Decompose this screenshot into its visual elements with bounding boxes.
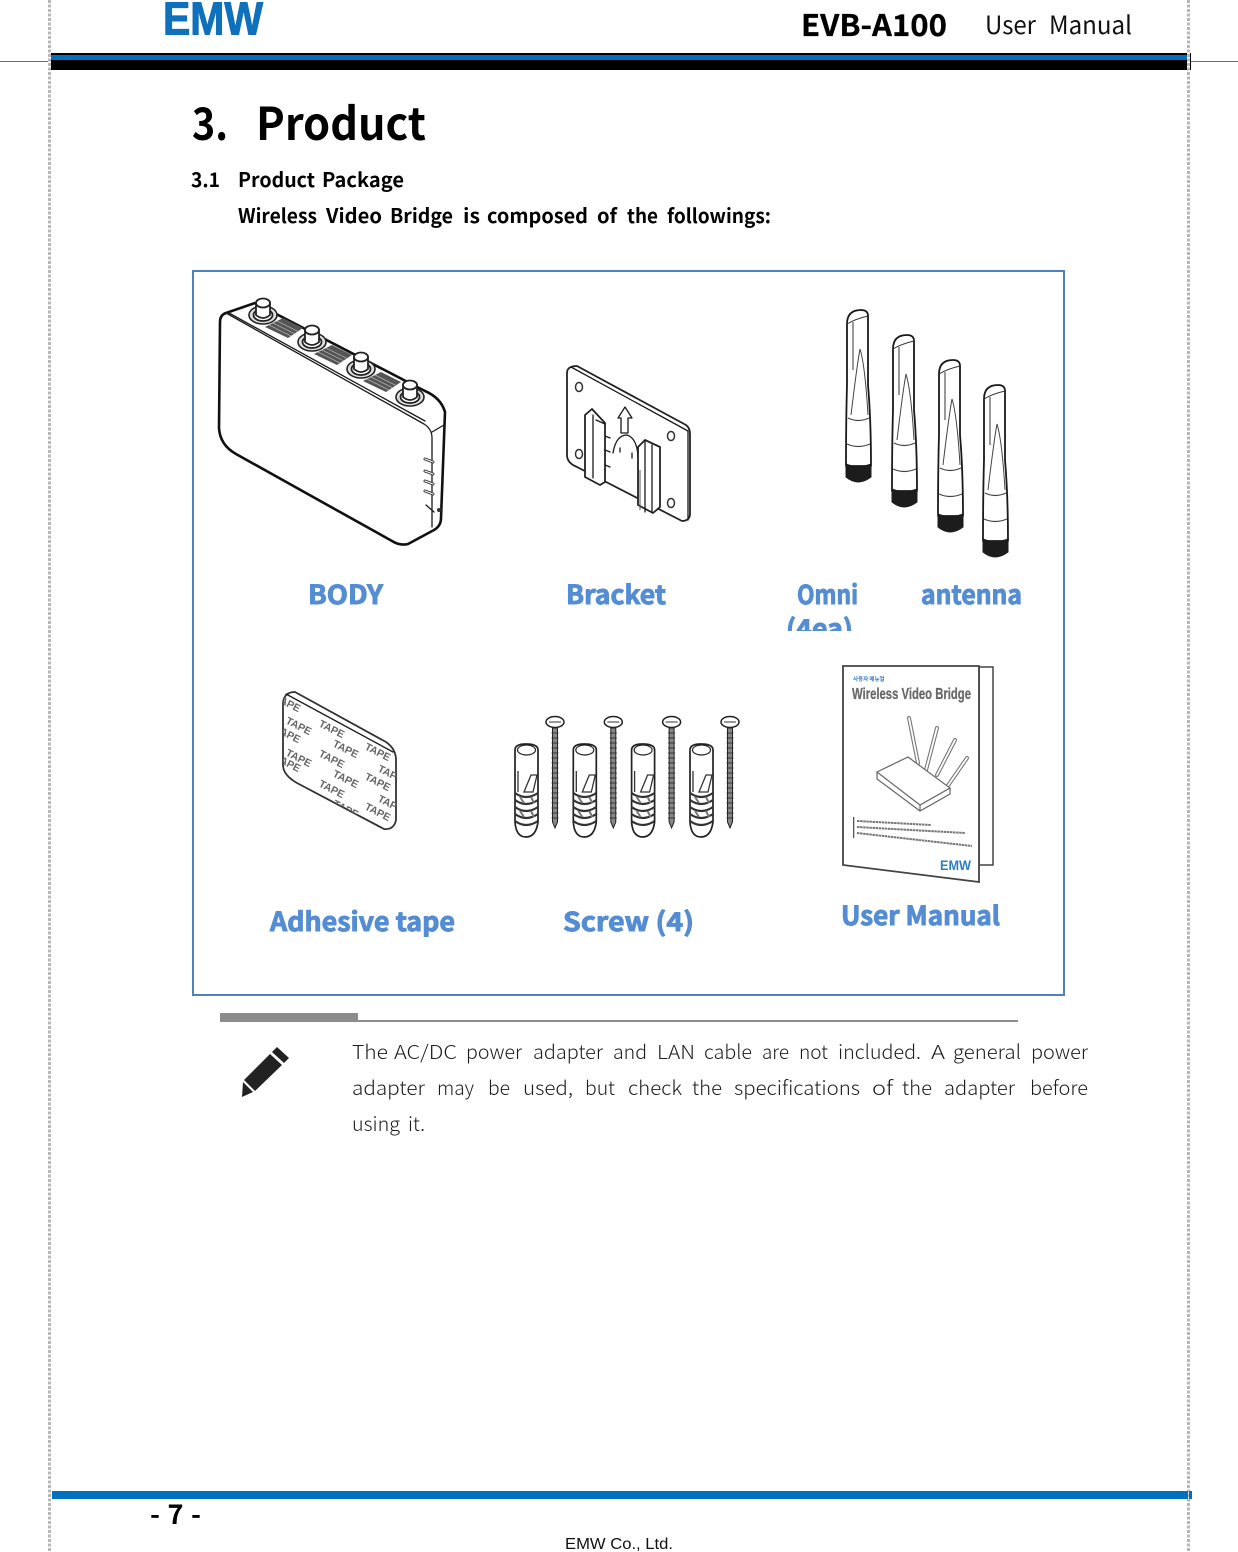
note text: it. [408,1108,425,1137]
note text: before [1030,1072,1088,1101]
illustration: omni antennas [846,310,1008,557]
illustration: screws and anchors [515,716,739,837]
illustration: adhesive tape [282,691,397,830]
note text: The [352,1036,388,1065]
note text: using [352,1108,400,1137]
illustration: bracket [567,366,690,521]
note text: the [692,1072,722,1101]
header rule [51,53,1191,70]
note text: be [488,1072,510,1101]
header title: EVB-A100: EVB-A100 [801,1,947,45]
intro sentence: of [597,200,619,229]
label: Omni antenna (4ea): Omni [797,575,858,612]
intro sentence: is [463,200,480,229]
header subtitle: User Manual: User [985,6,1036,42]
illustration: user manual booklet: EMW [940,857,972,873]
intro sentence [238,200,771,229]
heading: 3. Product: 3. [192,88,228,153]
illustration: adhesive tape: TAPE [317,748,346,771]
illustration: adhesive tape: TAPE [273,723,302,746]
note text: included. [838,1036,921,1065]
note text: may [437,1072,474,1101]
note text [352,1036,1089,1137]
label: User Manual: User Manual [841,896,1000,933]
illustration: adhesive tape: TAPE [331,798,360,821]
note text: adapter [352,1072,426,1101]
intro sentence: Bridge [390,200,453,229]
note text: are [762,1036,789,1065]
page number: - 7 - [150,1493,201,1532]
label: Screw (4): Screw (4) [563,902,694,939]
illustration: adhesive tape: TAPE [331,738,360,761]
header subtitle: User Manual: Manual [1049,6,1132,42]
illustration: adhesive tape: TAPE [331,768,360,791]
illustration: adhesive tape: TAPE [273,752,302,775]
intro sentence: the [627,200,658,229]
note text: adapter [944,1072,1016,1101]
note text: power [1031,1036,1089,1065]
label: Bracket: Bracket [566,575,666,612]
note text: used, [523,1072,573,1101]
note text: specifications [734,1072,860,1101]
label: Omni antenna (4ea): (4ea) [786,609,853,646]
note text: power [466,1036,523,1065]
intro sentence: composed [487,200,588,229]
note divider [220,1013,1018,1022]
note text: of [872,1072,894,1101]
subheading: 3.1 Product Package [191,164,404,193]
illustration: user manual booklet: Wireless Video Bridge [852,686,971,703]
illustration: adhesive tape: TAPE [317,718,346,741]
subheading: 3.1 Product Package: Product [238,164,316,193]
note text: AC/DC [394,1036,457,1065]
intro sentence: Video [325,200,382,229]
header subtitle: User Manual [985,6,1132,42]
label: Adhesive tape: Adhesive tape [269,902,455,939]
icon: pencil [242,1047,289,1097]
illustration: adhesive tape: TAPE [284,778,313,801]
note text: A [931,1036,946,1065]
illustration: adhesive tape: TAPE [363,801,392,824]
illustration: adhesive tape: TAPE [363,741,392,764]
illustration: user manual booklet [843,666,993,882]
note text: not [799,1036,828,1065]
label: Omni antenna (4ea) [788,582,1021,631]
label: BODY: BODY [308,575,384,612]
illustration: adhesive tape: TAPE [363,771,392,794]
illustration: body [219,298,445,545]
footer rule [52,1491,1192,1499]
note text: check [628,1072,682,1101]
illustration: adhesive tape: TAPE [273,692,302,715]
subheading: 3.1 Product Package: 3.1 [191,164,220,193]
illustration: adhesive tape: TAPE [284,747,313,770]
note text: general [953,1036,1021,1065]
label: Omni antenna (4ea): antenna [921,575,1022,612]
note text: adapter [533,1036,604,1065]
illustration: adhesive tape: TAPE [376,763,405,786]
illustration: adhesive tape: TAPE [317,778,346,801]
illustration: adhesive tape: TAPE [376,793,405,816]
illustration: adhesive tape: TAPE [284,715,313,738]
note text: cable [704,1036,752,1065]
note text: and [613,1036,647,1065]
intro sentence: Wireless [238,200,317,229]
intro sentence: followings: [667,200,771,229]
illustration: user manual booklet: 사용자 매뉴얼 [853,675,885,683]
note text: the [902,1072,932,1101]
heading: 3. Product: Product [256,88,426,153]
panel: package contents [193,271,1064,995]
note text: but [585,1072,615,1101]
note text: LAN [657,1036,695,1065]
subheading: 3.1 Product Package: Package [322,164,404,193]
